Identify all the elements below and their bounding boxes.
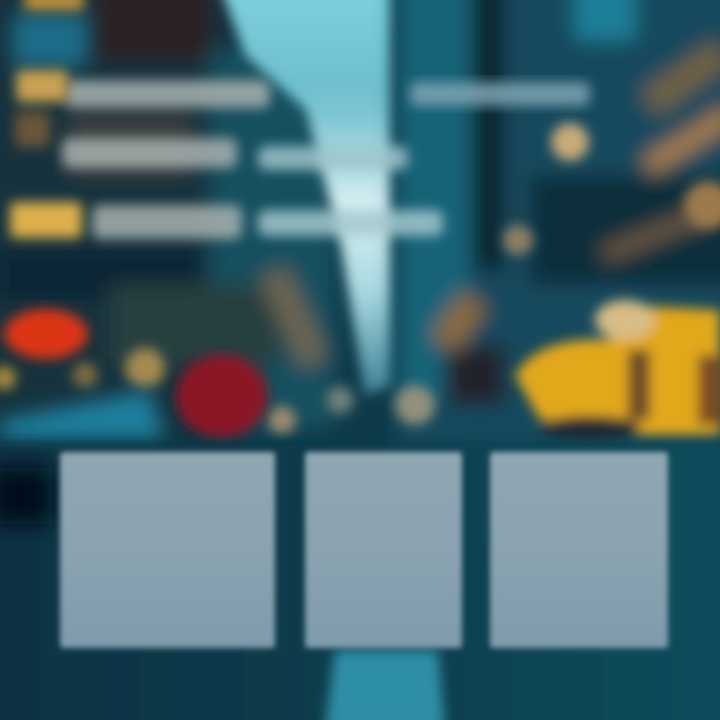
left buildings [0,0,335,440]
left street reflection [0,390,165,440]
heading text blur right [410,82,590,106]
road [325,650,445,720]
yellow car [515,300,720,440]
red sign [4,309,88,359]
heading text blur left [62,80,443,239]
panel: centre card [305,452,462,648]
right buildings [396,0,720,450]
yellow highlight blocks [10,0,84,238]
red figure [176,354,268,438]
dark corner block [0,468,52,524]
window lights [0,123,720,434]
panel: left card [60,452,275,648]
sky [218,0,392,395]
panel: right card [490,452,668,648]
lower dark band [0,445,720,720]
